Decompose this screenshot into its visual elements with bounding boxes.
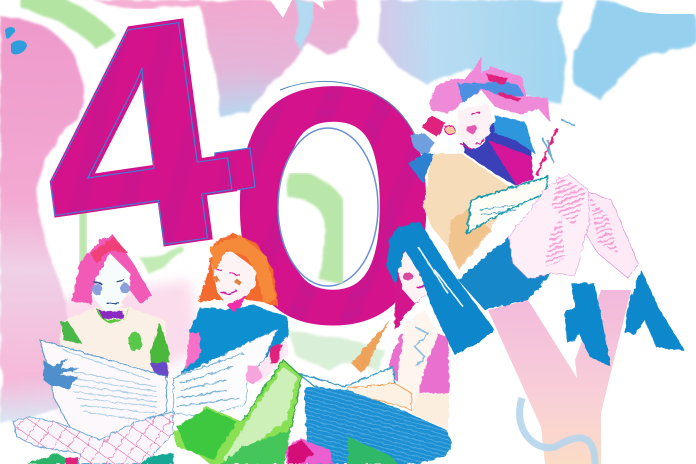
wash: right blue cloud <box>572 0 696 100</box>
alien badge <box>128 332 142 352</box>
hair bun <box>422 115 446 137</box>
wash: blue cloud <box>378 0 566 103</box>
jeans lines <box>305 387 451 464</box>
wash: pale pink floor <box>55 280 200 420</box>
person: orange hair woman <box>178 233 289 383</box>
arm tattoo <box>415 327 428 367</box>
person: pink hair woman <box>13 235 333 464</box>
torso side <box>411 393 450 430</box>
number 40 <box>18 0 433 385</box>
wash: green arc top left <box>22 0 108 44</box>
hand sketch <box>541 120 575 163</box>
wash: blue spots <box>5 27 27 54</box>
hair top magenta strands <box>486 73 521 102</box>
hair back <box>461 123 533 185</box>
face <box>212 250 257 308</box>
face details <box>213 268 240 293</box>
hair red top <box>90 237 128 263</box>
big peach Y shape <box>488 290 631 464</box>
magenta flower centre <box>288 440 313 464</box>
leg far shading <box>590 197 618 253</box>
green bottom item <box>140 453 173 464</box>
hair top blue strands <box>458 80 525 103</box>
wash: white split at top <box>270 0 325 18</box>
wash: top centre pink and lilac <box>198 0 358 117</box>
hair strands <box>210 235 277 303</box>
face <box>458 103 493 150</box>
earring <box>445 125 455 135</box>
neck shadow <box>227 295 247 312</box>
hair top <box>430 57 550 122</box>
wash: top pink strip <box>92 0 205 8</box>
eye and lips <box>460 112 485 150</box>
orange hatch left <box>351 320 390 373</box>
pants darker <box>177 408 237 460</box>
green pants <box>173 360 302 464</box>
sleeve right <box>150 323 170 363</box>
digit 0 hatch: 0 <box>233 28 433 385</box>
green cloth lower <box>220 430 290 464</box>
hand blue <box>43 358 80 388</box>
fishnet pattern <box>13 412 173 464</box>
boot left <box>565 283 611 367</box>
wash: blue stripe over pink <box>296 0 312 52</box>
wash: green arc inside zero <box>288 183 338 282</box>
wash: green band behind heads <box>140 247 186 275</box>
blue hair <box>386 222 495 355</box>
hair side blue <box>495 115 535 153</box>
sleeve purple arm <box>150 362 168 378</box>
book in lap <box>298 367 395 393</box>
wash: white top right gap <box>612 0 696 14</box>
arm shade <box>270 343 282 363</box>
digit 0: 0 <box>233 28 433 385</box>
newspaper left text lines <box>63 350 157 420</box>
jeans <box>305 387 451 464</box>
cheek and smile <box>403 272 431 287</box>
cheek marks <box>92 283 130 295</box>
skirt <box>458 237 551 310</box>
sweater shading <box>448 210 491 270</box>
hair back <box>198 233 278 307</box>
book <box>467 177 548 233</box>
forearm <box>348 383 411 410</box>
wash: pale green right of shirt <box>288 330 385 372</box>
person: top woman sitting on the zero <box>408 57 685 367</box>
pants outline <box>242 360 302 433</box>
green boot of jeans <box>348 437 398 464</box>
shoe base <box>27 453 77 464</box>
sweater <box>423 153 515 270</box>
digit 4 right end <box>212 148 255 194</box>
face <box>92 253 130 312</box>
shirt <box>178 305 289 380</box>
wash: left pink <box>0 15 84 425</box>
book lines <box>480 205 516 215</box>
pants light <box>223 367 297 460</box>
cheek <box>467 124 477 134</box>
newspaper right lines <box>177 353 243 407</box>
digit 0 arc line <box>280 81 415 135</box>
dark collar strands <box>408 153 435 183</box>
arm <box>398 310 438 410</box>
eyes and mouth <box>93 280 125 303</box>
pencil <box>536 128 557 175</box>
tail swirl <box>520 398 595 464</box>
sleeve left <box>61 322 83 344</box>
collar purple <box>98 310 123 319</box>
hair highlights <box>418 247 463 307</box>
arm right <box>247 337 288 383</box>
tank top <box>388 333 450 394</box>
shirt <box>43 307 170 380</box>
arm left <box>185 333 200 370</box>
digit 0 counter <box>278 128 378 286</box>
fishnet leg <box>13 412 173 464</box>
hand pink <box>246 365 263 385</box>
magenta underhair <box>395 280 428 330</box>
hair <box>72 235 152 303</box>
face <box>398 247 438 303</box>
hair scrunchie <box>410 133 435 157</box>
leg near shading <box>545 177 586 267</box>
boot right <box>625 270 685 351</box>
newspaper left page <box>40 340 167 447</box>
person: woman with blue hair <box>298 222 495 464</box>
shoe spot <box>66 457 78 464</box>
wash: green arc lower left <box>80 212 86 285</box>
hair back magenta <box>488 140 533 185</box>
newspaper right page <box>173 328 278 417</box>
leg far <box>581 192 638 278</box>
pink flower <box>287 438 333 464</box>
leg near <box>509 173 590 278</box>
collar <box>97 308 129 323</box>
